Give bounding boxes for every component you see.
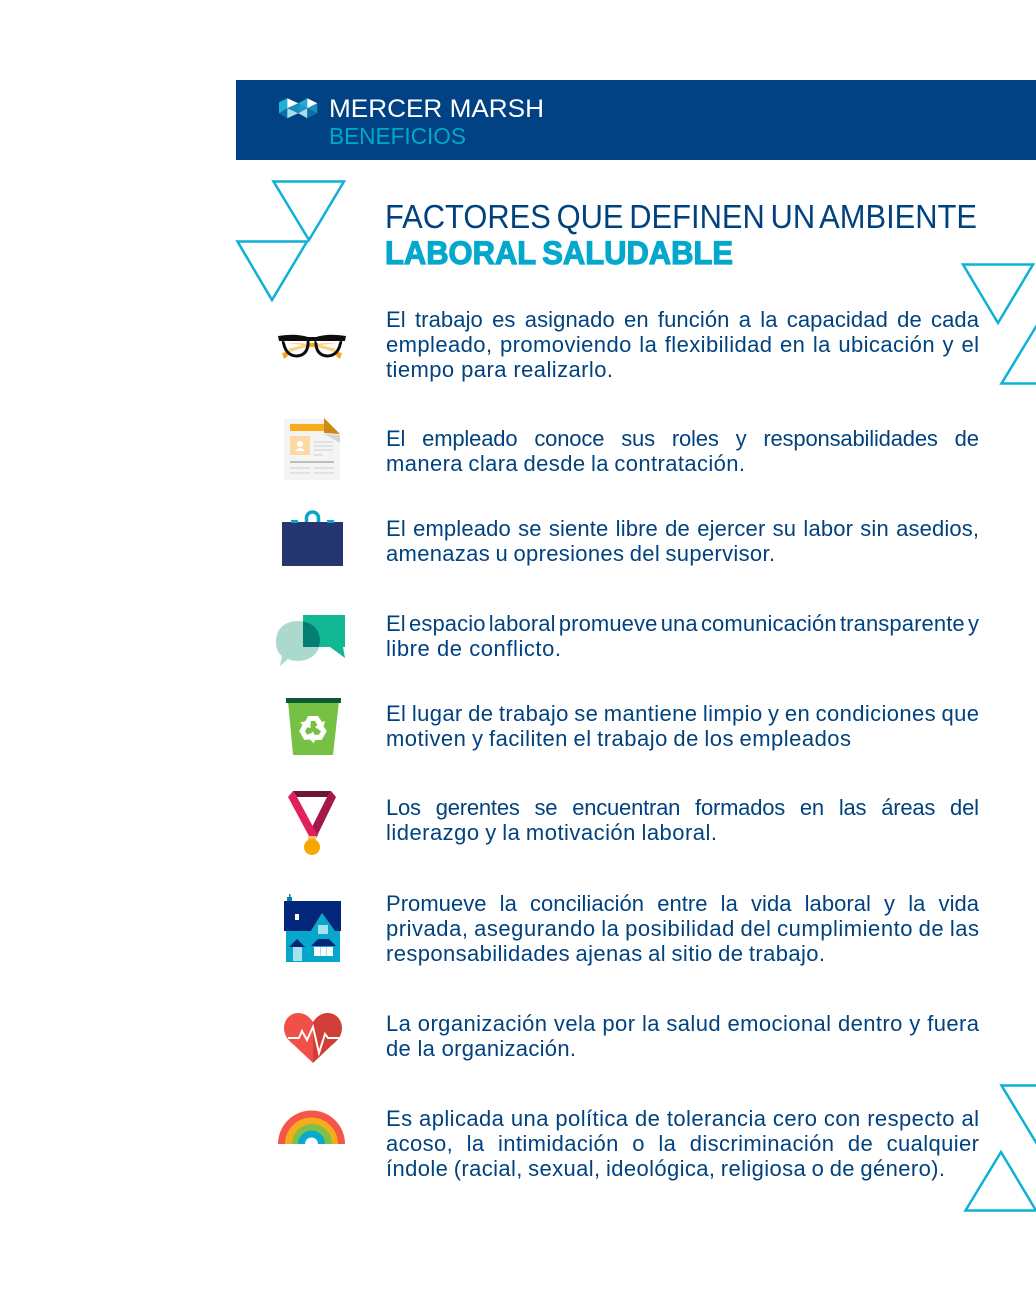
text block 1 (386, 307, 980, 382)
text block 3: amenazas u opresiones del supervisor. (386, 541, 775, 566)
text block 5: El lugar de trabajo se mantiene limpio y en condiciones que (386, 701, 979, 726)
text block 1: tiempo para realizarlo. (386, 357, 613, 382)
text block 9 (386, 1106, 979, 1181)
text block 9: acoso, la intimidación o la discriminación de cualquier (386, 1131, 979, 1156)
title (385, 198, 977, 271)
header band (236, 80, 1036, 160)
text block 2 (386, 426, 979, 476)
decorative triangles: right (963, 264, 1036, 384)
icon: house (284, 894, 341, 962)
text block 5: motiven y faciliten el trabajo de los empleados (386, 726, 851, 751)
icon: recycling bin (286, 698, 341, 755)
icon: heart with pulse (284, 1013, 342, 1063)
text block 7: responsabilidades ajenas al sitio de trabajo. (386, 941, 825, 966)
icon: rainbow (278, 1110, 345, 1144)
text block 4: El espacio laboral promueve una comunicación transparente y (386, 611, 979, 636)
text block 4: libre de conflicto. (386, 636, 561, 661)
text block 6: liderazgo y la motivación laboral. (386, 820, 717, 845)
icon: document (284, 418, 340, 480)
logo text: Mercer Marsh: MERCER MARSH (329, 95, 544, 123)
text block 1: empleado, promoviendo la flexibilidad en la ubicación y el (386, 332, 979, 357)
text block 3 (386, 516, 979, 566)
text block 7: Promueve la conciliación entre la vida laboral y la vida (386, 891, 980, 916)
icon: briefcase (282, 512, 343, 566)
logo text: Beneficios: BENEFICIOS (329, 123, 466, 149)
text block 9: Es aplicada una política de tolerancia cero con respecto al (386, 1106, 979, 1131)
text block 6 (386, 795, 979, 845)
text block 4 (386, 611, 979, 661)
text block 8 (386, 1011, 980, 1061)
text block 2: El empleado conoce sus roles y responsabilidades de (386, 426, 979, 451)
text block 7: privada, asegurando la posibilidad del cumplimiento de las (386, 916, 979, 941)
decorative triangles: bottom right (966, 1086, 1036, 1210)
text block 7 (386, 891, 980, 966)
text block 8: La organización vela por la salud emocional dentro y fuera (386, 1011, 980, 1036)
text block 8: de la organización. (386, 1036, 576, 1061)
text block 5 (386, 701, 979, 751)
icon: Mercer Marsh logo (279, 98, 317, 118)
icon: glasses (278, 335, 346, 359)
icon: medal (288, 791, 336, 855)
text block 3: El empleado se siente libre de ejercer su labor sin asedios, (386, 516, 979, 541)
title: FACTORES QUE DEFINEN UN AMBIENTE (385, 198, 977, 235)
text block 2: manera clara desde la contratación. (386, 451, 745, 476)
decorative triangles: top left (238, 182, 344, 300)
text block 1: El trabajo es asignado en función a la capacidad de cada (386, 307, 980, 332)
title: LABORAL SALUDABLE (385, 235, 733, 271)
icon: speech bubbles (276, 615, 345, 666)
text block 6: Los gerentes se encuentran formados en las áreas del (386, 795, 979, 820)
text block 9: índole (racial, sexual, ideológica, religiosa o de género). (386, 1156, 945, 1181)
